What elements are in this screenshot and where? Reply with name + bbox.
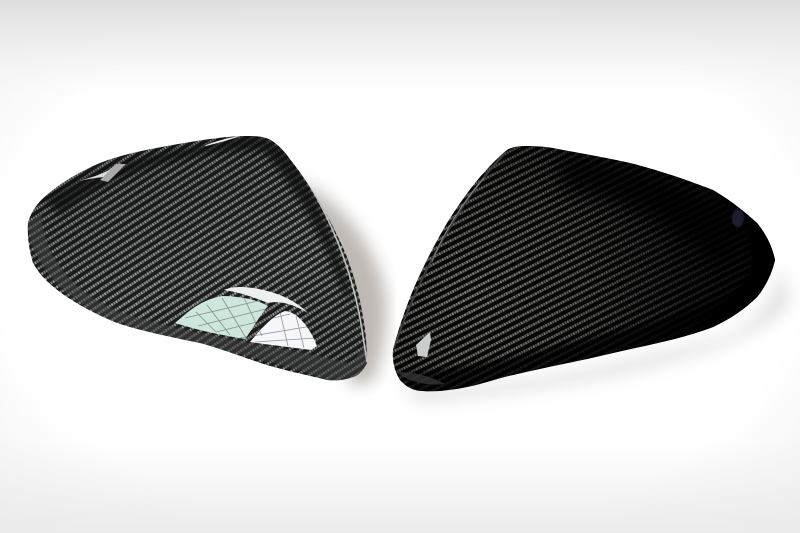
carbon weave: left (28, 136, 367, 380)
shadow: left cover (300, 180, 387, 385)
carbon weave: right (392, 146, 775, 392)
reflection: window top (224, 287, 308, 313)
reflection: blue sheen (732, 209, 744, 227)
grey edge: right top left (394, 152, 506, 348)
dark top rim: left (45, 133, 352, 300)
reflection: window right (250, 311, 317, 350)
reflection: top highlight (80, 164, 122, 181)
reflection: small window (416, 332, 431, 357)
right mirror cover (392, 146, 775, 392)
pale edge: left (302, 176, 367, 362)
reflection: window lower (175, 296, 268, 339)
left mirror cover (28, 136, 367, 380)
dark reflection: upper area right (560, 150, 745, 270)
dark band: lower lip right (396, 265, 774, 392)
dark rim: right side (718, 193, 775, 325)
lower tip sheen (396, 372, 445, 384)
grey outer rim: left (28, 212, 372, 382)
shadow: right cover (400, 262, 790, 402)
reflection: window bars (185, 298, 316, 348)
